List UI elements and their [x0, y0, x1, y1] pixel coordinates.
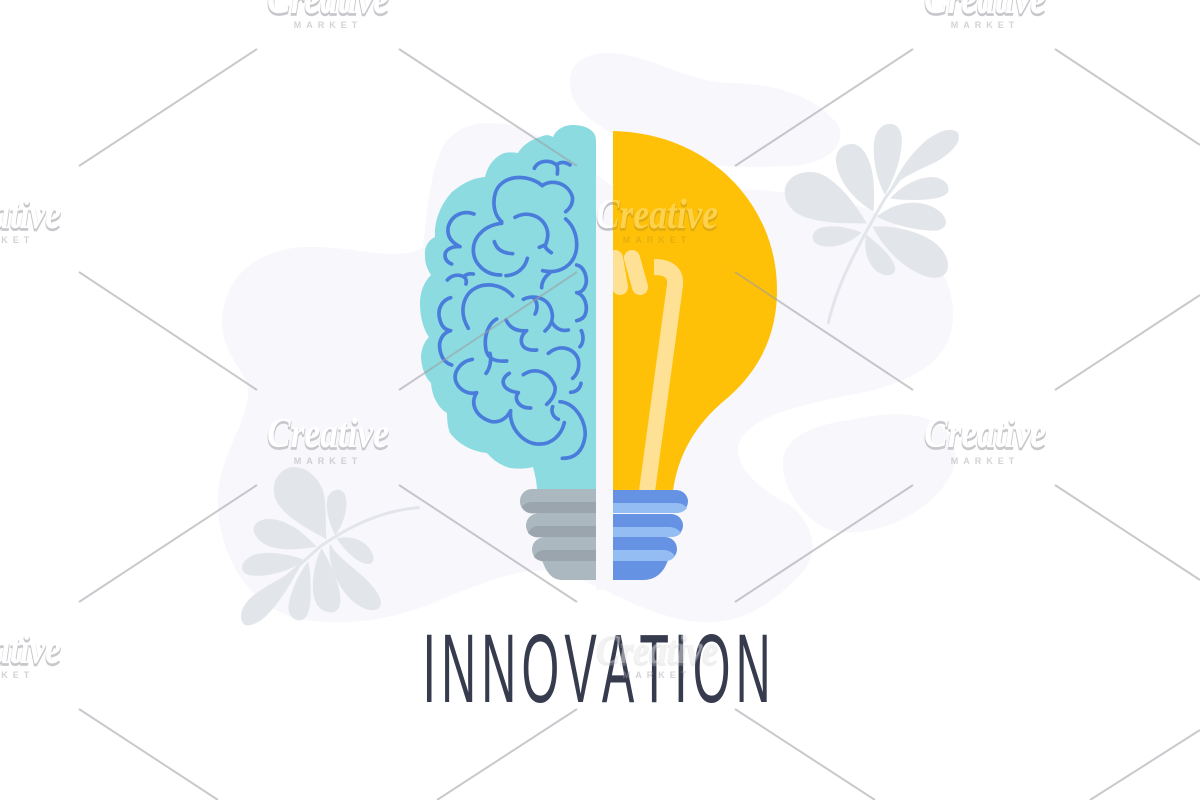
brain squiggles, lower: [455, 348, 585, 458]
icon: bulb base, blue side: [613, 490, 688, 580]
watermark logos: MARKET: [623, 670, 691, 680]
watermark logos: Creative: [924, 411, 1046, 457]
icon: light bulb half: [613, 131, 777, 491]
watermark logos: MARKET: [951, 456, 1019, 466]
background blobs: [218, 53, 955, 622]
icon: right leaf sprig: [785, 124, 959, 323]
icon: left leaf sprig: [241, 467, 418, 625]
watermark logos: Creative: [596, 194, 718, 240]
watermark logos: MARKET: [294, 20, 362, 30]
watermark logos: Creative: [267, 411, 389, 457]
watermark logos: [0, 0, 1046, 680]
watermark logos: Creative: [596, 627, 718, 673]
watermark logos: MARKET: [294, 456, 362, 466]
brain squiggles, upper: [439, 161, 586, 373]
watermark logos: Creative: [267, 413, 389, 459]
watermark logos: MARKET: [951, 20, 1019, 30]
filament: [615, 258, 675, 491]
watermark logos: Creative: [924, 413, 1046, 459]
watermark logos: Creative: [596, 192, 718, 238]
watermark logos: Creative: [596, 629, 718, 675]
icon: bulb base, gray side: [520, 480, 616, 590]
watermark logos: MARKET: [623, 235, 691, 245]
title: INNOVATION: [422, 616, 776, 724]
icon: brain half: [420, 125, 596, 491]
